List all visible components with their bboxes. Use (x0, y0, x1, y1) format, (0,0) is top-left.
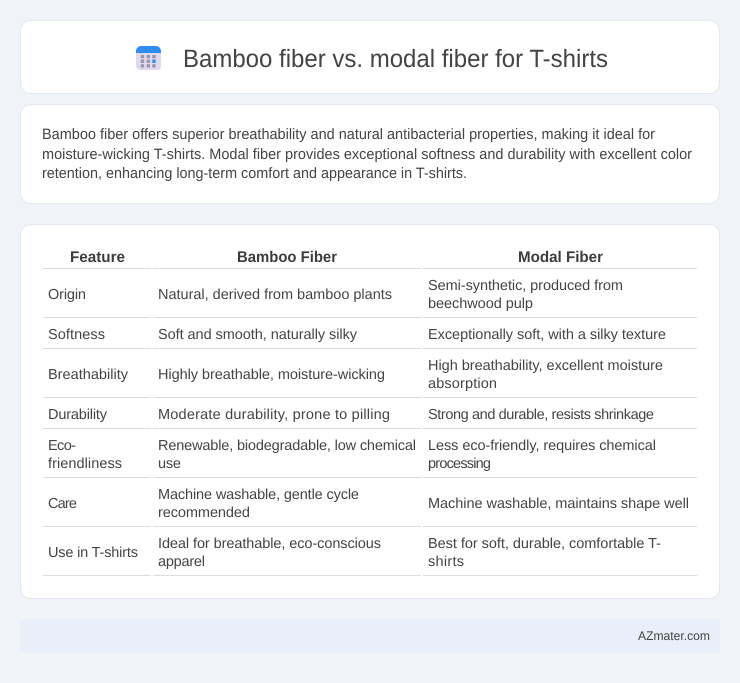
row: care: Machine washable, maintains shape well (428, 496, 689, 512)
footer bar (20, 619, 720, 653)
table header: Bamboo Fiber (237, 249, 337, 266)
panel: comparison table (20, 224, 720, 598)
row: durability: Moderate durability, prone to pilling (158, 407, 390, 423)
row: care: recommended (158, 505, 250, 521)
row: eco-friendliness (48, 438, 656, 472)
row: softness: Exceptionally soft, with a silky texture (428, 327, 666, 343)
footer credit: AZmater.com (638, 629, 710, 643)
table header (70, 249, 603, 266)
row: durability (48, 407, 654, 423)
icon: calendar (136, 46, 161, 70)
panel: title card (20, 20, 720, 94)
row: breathability (48, 358, 663, 392)
row: care: Care (48, 496, 77, 512)
row: eco-friendliness: Eco- (48, 438, 76, 454)
row: origin: Natural, derived from bamboo plants (158, 287, 392, 303)
row: breathability: Highly breathable, moisture-wicking (158, 367, 385, 383)
summary text: moisture-wicking T-shirts. Modal fiber provides exceptional softness and durability with excellent color (42, 146, 692, 163)
table header: Modal Fiber (518, 249, 603, 266)
row: eco-friendliness: use (158, 456, 181, 472)
row: use in t-shirts: Ideal for breathable, eco-conscious (158, 536, 381, 552)
summary text (42, 126, 692, 182)
row: eco-friendliness: processing (428, 456, 491, 472)
row: origin: Origin (48, 287, 86, 303)
row: breathability: High breathability, excellent moisture (428, 358, 663, 374)
row: durability: Durability (48, 407, 108, 423)
row: eco-friendliness: friendliness (48, 456, 122, 472)
row: softness: Soft and smooth, naturally silky (158, 327, 358, 343)
panel: summary (20, 104, 720, 204)
row: care: Machine washable, gentle cycle (158, 487, 359, 503)
row: softness (48, 327, 666, 343)
row: use in t-shirts: Best for soft, durable, comfortable T- (428, 536, 661, 552)
row: eco-friendliness: Renewable, biodegradable, low chemical (158, 438, 416, 454)
row: durability: Strong and durable, resists shrinkage (428, 407, 654, 423)
row: use in t-shirts (48, 536, 661, 570)
row: breathability: absorption (428, 376, 497, 392)
summary text: Bamboo fiber offers superior breathability and natural antibacterial properties, making it ideal for (42, 126, 655, 143)
row: use in t-shirts: shirts (428, 554, 464, 570)
row: eco-friendliness: Less eco-friendly, requires chemical (428, 438, 656, 454)
summary text: retention, enhancing long-term comfort and appearance in T-shirts. (42, 165, 467, 182)
row: origin: Semi-synthetic, produced from (428, 278, 623, 294)
row: breathability: Breathability (48, 367, 129, 383)
row: care (48, 487, 689, 521)
row: softness: Softness (48, 327, 105, 343)
row: use in t-shirts: Use in T-shirts (48, 545, 138, 561)
title: Bamboo fiber vs. modal fiber for T-shirts (183, 45, 608, 73)
row: origin: beechwood pulp (428, 296, 533, 312)
row: origin (48, 278, 623, 312)
table header: Feature (70, 249, 125, 266)
row: use in t-shirts: apparel (158, 554, 205, 570)
